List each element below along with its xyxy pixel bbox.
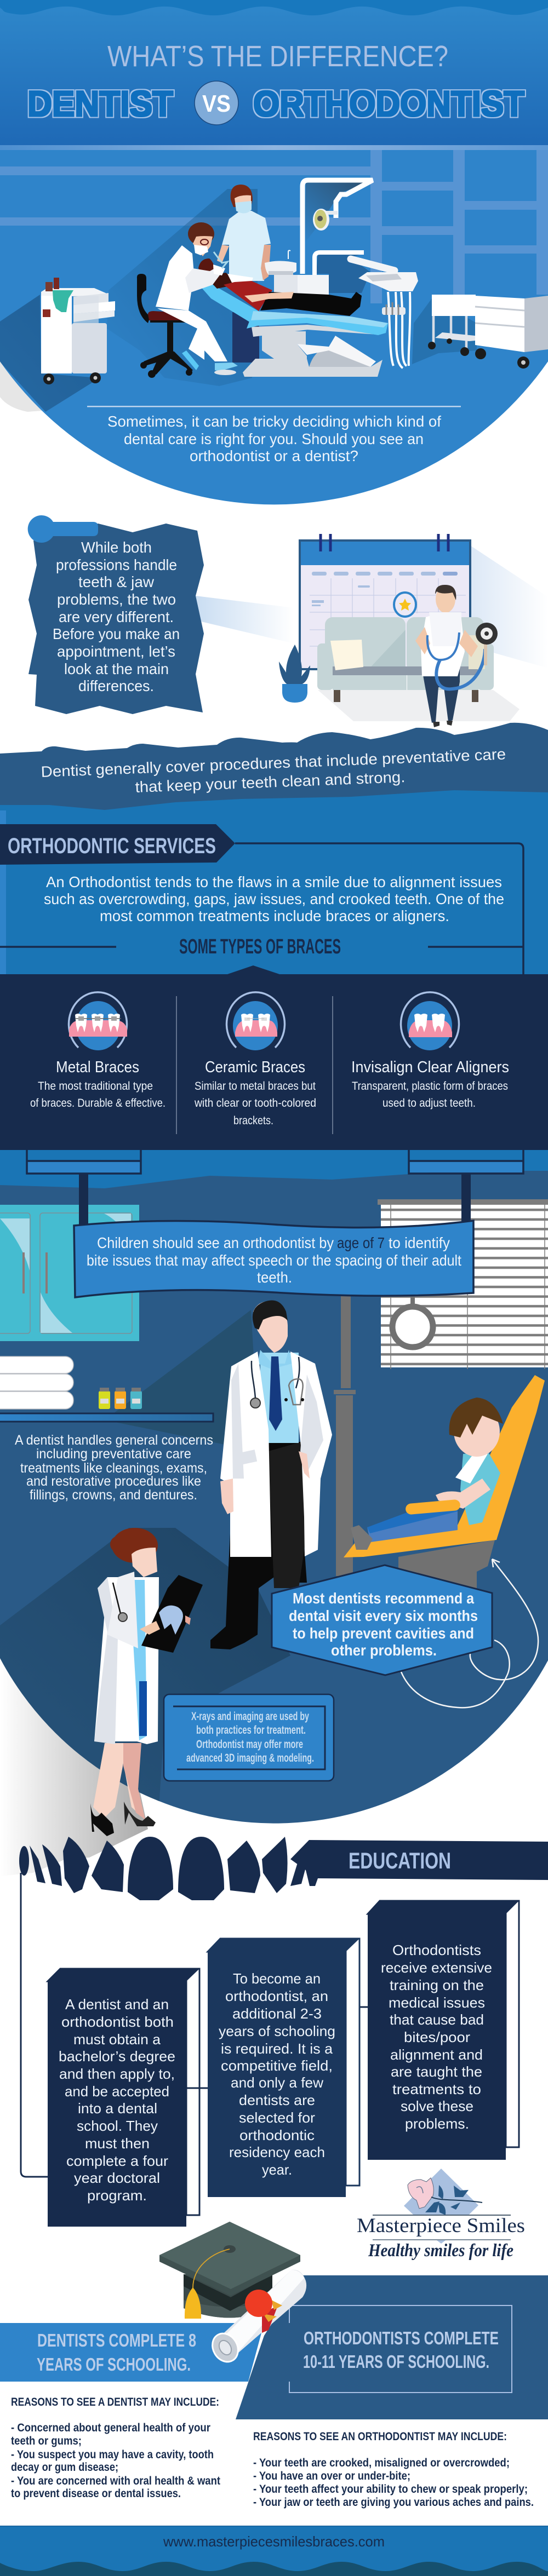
- icon: row of teeth: [19, 1837, 306, 1900]
- callout: age of 7: bite issues that may affect speech or the spacing of their adult: [87, 1252, 461, 1269]
- callout: six months visit: to help prevent cavities and: [293, 1625, 474, 1642]
- long shadows behind scene: [0, 182, 477, 412]
- callout: x-rays: [164, 1694, 334, 1781]
- panel: education step 3: alignment and: [390, 2046, 483, 2063]
- heading: orthodontic services: ORTHODONTIC SERVICES: [8, 834, 216, 858]
- text: invisalign: Transparent, plastic form of braces: [352, 1080, 508, 1092]
- panel: education step 2: [208, 1939, 359, 2197]
- frame line: education steps: [21, 1873, 48, 2177]
- text: invisalign: [351, 1059, 509, 1109]
- text: banner sentence: that keep your teeth clean and strong.: [135, 768, 406, 796]
- text: metal braces: of braces. Durable & effective.: [30, 1097, 165, 1109]
- text: both professions: problems, the two: [57, 591, 176, 608]
- panel: education step 1: program.: [87, 2187, 147, 2204]
- callout: x-rays: advanced 3D imaging & modeling.: [186, 1752, 314, 1764]
- panel: dentists complete: DENTISTS COMPLETE 8: [37, 2330, 196, 2350]
- heading: dentist: DENTIST: [27, 83, 173, 124]
- text: metal braces: Metal Braces: [56, 1059, 139, 1076]
- text: reasons to see an orthodontist: - You have an over or under-bite;: [253, 2470, 410, 2482]
- icon: pin: [28, 515, 98, 543]
- header background: [0, 0, 548, 150]
- panel: education step 3: training on the: [390, 1977, 484, 1993]
- text: ceramic braces: brackets.: [233, 1114, 273, 1127]
- text: dentist handles: [15, 1433, 213, 1503]
- curved arrow: [401, 1559, 538, 1707]
- panel: orthodontists complete: [236, 2275, 548, 2419]
- text: invisalign: Invisalign Clear Aligners: [351, 1059, 509, 1076]
- shelf: [0, 1413, 213, 1422]
- text: both professions: teeth & jaw: [78, 573, 155, 590]
- text: dentist handles: A dentist handles general concerns: [15, 1433, 213, 1448]
- text: invisalign: used to adjust teeth.: [383, 1097, 476, 1109]
- text: ceramic braces: Ceramic Braces: [205, 1059, 305, 1076]
- hanging sign brackets: [27, 1150, 523, 1174]
- text: reasons to see an orthodontist: [253, 2430, 534, 2509]
- illustration: right cabinets: [428, 295, 548, 369]
- grey shadow of dentist on white: [0, 1654, 148, 1876]
- illustration: male doctor: [210, 1300, 332, 1649]
- panel: orthodontic services background: [0, 789, 548, 1194]
- illustration: child in orange chair: [344, 1375, 545, 1591]
- icon: metal braces: [69, 992, 127, 1050]
- panel: education step 3: bites/poor: [404, 2029, 470, 2045]
- logo: masterpiece smiles: Healthy smiles for life: [368, 2241, 513, 2261]
- text: both professions: differences.: [78, 677, 154, 694]
- heading: orthodontist: ORTHODONTIST: [253, 83, 524, 124]
- footer: [0, 2526, 548, 2576]
- panel: education step 1: must obtain a: [73, 2031, 161, 2048]
- text: orthodontist explanation: An Orthodontist tends to the flaws in a smile due to alignment issues: [46, 873, 502, 890]
- text: orthodontist explanation: most common treatments include braces or aligners.: [100, 907, 449, 924]
- illustration: plant: [279, 645, 310, 703]
- callout: six months visit: other problems.: [331, 1642, 437, 1659]
- text: orthodontist explanation: such as overcrowding, gaps, jaw issues, and crooked teeth. One of the: [44, 890, 504, 907]
- illustration: nurse: [217, 185, 271, 363]
- illustration: dentist: [156, 222, 238, 375]
- text: introduction: orthodontist or a dentist?: [190, 447, 358, 464]
- callout: x-rays: X-rays and imaging are used by: [191, 1710, 309, 1723]
- sign bracket fills: [28, 1162, 522, 1172]
- panel: education step 1: complete a four: [66, 2153, 168, 2169]
- text: introduction: Sometimes, it can be tricky deciding which kind of: [107, 413, 441, 430]
- text: reasons to see a dentist: [11, 2396, 220, 2500]
- title: what's the difference: WHAT’S THE DIFFERENCE?: [107, 40, 448, 73]
- panel: dental office scene background: [0, 150, 548, 504]
- text: both professions: While both: [81, 539, 152, 556]
- text: website: www.masterpiecesmilesbraces.com: [163, 2533, 385, 2550]
- panel: education step 3: are taught the: [391, 2063, 482, 2080]
- text: banner sentence: Dentist generally cover procedures that include preventative care: [41, 745, 506, 780]
- panel: education step 1: and then apply to,: [59, 2066, 175, 2082]
- callout: age of 7: teeth.: [257, 1269, 292, 1286]
- panel: education step 3: receive extensive: [381, 1959, 492, 1976]
- text: reasons to see a dentist: to prevent disease or dental issues.: [11, 2487, 181, 2500]
- text: dentist handles: fillings, crowns, and dentures.: [30, 1487, 197, 1503]
- icon: clear aligners: [401, 992, 459, 1050]
- text: reasons to see an orthodontist: REASONS TO SEE AN ORTHODONTIST MAY INCLUDE:: [253, 2430, 507, 2443]
- badge: vs: VS: [202, 90, 231, 117]
- window frame bars: [0, 150, 548, 303]
- text: both professions: appointment, let’s: [57, 643, 175, 660]
- panel: education step 3: Orthodontists: [392, 1942, 481, 1958]
- panel: education step 2: competitive field,: [221, 2057, 333, 2074]
- connector frame line: [235, 843, 523, 975]
- illustration: doctor on sofa: [415, 585, 498, 727]
- text: both professions: [53, 539, 180, 694]
- grey shadow on white left of circle: [0, 361, 42, 412]
- beam left of calendar: [196, 596, 294, 643]
- illustration: calendar: [300, 534, 470, 669]
- panel: education step 2: years of schooling: [219, 2023, 335, 2039]
- panel: education step 3: treatments to: [392, 2081, 481, 2097]
- panel: education step 2: orthodontist, an: [225, 1988, 328, 2004]
- panel: education step 1: year doctoral: [74, 2170, 160, 2186]
- text: reasons to see a dentist: - You are concerned with oral health & want: [11, 2475, 220, 2487]
- illustration: left cart: [41, 278, 115, 384]
- illustration: grey floor lamp: [334, 1295, 433, 1576]
- heading: some types of braces: SOME TYPES OF BRACES: [179, 935, 341, 958]
- text: reasons to see a dentist: - You suspect you may have a cavity, tooth: [11, 2448, 214, 2461]
- text: introduction: dental care is right for you. Should you see an: [124, 430, 424, 447]
- text: reasons to see a dentist: - Concerned about general health of your: [11, 2422, 210, 2434]
- panel: clinic room background: [0, 1171, 548, 1824]
- divider line: [87, 406, 461, 407]
- heading: orthodontic services: [0, 824, 235, 865]
- icon: ceramic braces: [227, 992, 285, 1050]
- heading: education: EDUCATION: [349, 1848, 451, 1873]
- illustration: graduation cap: [159, 2222, 300, 2319]
- sign poles: [79, 1174, 471, 1228]
- illustration: diploma: [207, 2270, 306, 2366]
- panel: education step 3: solve these: [401, 2098, 473, 2114]
- panel: education step 1: orthodontist both: [61, 2014, 174, 2030]
- illustration: dentist chair with patient: [196, 258, 388, 377]
- large shadows in clinic: [0, 1310, 290, 1807]
- text: dentist handles: and restorative procedures like: [26, 1474, 201, 1489]
- text: reasons to see an orthodontist: - Your teeth are crooked, misaligned or overcrowded;: [253, 2457, 510, 2469]
- callout: x-rays: Orthodontist may offer more: [196, 1738, 303, 1751]
- text: ceramic braces: with clear or tooth-colored: [194, 1097, 316, 1109]
- panel: differences note: [28, 515, 204, 714]
- text: reasons to see a dentist: teeth or gums;: [11, 2435, 82, 2447]
- panel: education step 2: selected for: [239, 2109, 315, 2126]
- panel: education step 2: dentists are: [239, 2092, 315, 2108]
- panel: education step 2: orthodontic: [239, 2127, 315, 2143]
- callout: age of 7: age of 7: [337, 1234, 385, 1251]
- text: reasons to see a dentist: REASONS TO SEE A DENTIST MAY INCLUDE:: [11, 2396, 219, 2408]
- text: dentist handles: including preventative care: [36, 1446, 191, 1462]
- panel: education step 1: must then: [85, 2135, 150, 2152]
- badge: vs: [195, 81, 238, 125]
- panel: education step 1: bachelor’s degree: [59, 2048, 175, 2065]
- callout: age of 7: Children should see an orthodontist by: [97, 1234, 334, 1251]
- callout: age of 7: to identify: [389, 1234, 450, 1251]
- text: ceramic braces: Similar to metal braces but: [195, 1080, 316, 1092]
- text: orthodontist explanation: [44, 873, 504, 924]
- text: banner sentence: [41, 745, 506, 796]
- panel: education step 1: A dentist and an: [65, 1996, 169, 2013]
- illustration: female dentist: [90, 1528, 203, 1836]
- text: dentist handles: treatments like cleanings, exams,: [20, 1461, 207, 1476]
- panel: dentists complete: [0, 2323, 264, 2382]
- panel: braces types: [0, 965, 548, 1150]
- text: both professions: are very different.: [59, 608, 174, 625]
- illustration: cabinet: [0, 1205, 139, 1341]
- callout: age of 7: [74, 1221, 473, 1297]
- panel: education step 3: [368, 1901, 519, 2160]
- banner: dentist generally cover: [0, 723, 548, 810]
- logo: masterpiece smiles: [357, 2169, 525, 2261]
- panel: education step 2: To become an: [233, 1970, 321, 1987]
- panel: education step 3: that cause bad: [390, 2011, 484, 2028]
- illustration: bottles: [99, 1388, 142, 1409]
- text: both professions: look at the main: [64, 660, 169, 677]
- text: reasons to see a dentist: decay or gum disease;: [11, 2461, 118, 2474]
- panel: education step 2: additional 2-3: [232, 2005, 322, 2022]
- illustration: window blinds: [378, 1199, 548, 1369]
- panel: education step 1: and be accepted: [65, 2083, 169, 2100]
- callout: six months visit: Most dentists recommend a: [293, 1590, 474, 1607]
- beam right of calendar: [470, 545, 548, 668]
- panel: education step 1: school. They: [77, 2118, 158, 2134]
- panel: education step 1: into a dental: [78, 2100, 157, 2117]
- text: both professions: Before you make an: [53, 625, 180, 642]
- callout: six months visit: [272, 1565, 492, 1675]
- callout: six months visit: dental visit every six months: [289, 1607, 478, 1624]
- logo: masterpiece smiles: Masterpiece Smiles: [357, 2215, 525, 2237]
- panel: education step 1: [48, 1969, 199, 2227]
- text: introduction: [107, 413, 441, 464]
- panel: education step 3: problems.: [405, 2115, 469, 2132]
- text: both professions: professions handle: [56, 556, 177, 573]
- panel: education step 2: year.: [262, 2161, 292, 2178]
- illustration: dental unit and lamp: [265, 180, 418, 368]
- panel: dentists complete: YEARS OF SCHOOLING.: [37, 2354, 191, 2374]
- panel: education step 3: medical issues: [389, 1994, 485, 2011]
- text: metal braces: The most traditional type: [38, 1080, 153, 1092]
- callout: x-rays: both practices for treatment.: [196, 1724, 306, 1737]
- illustration: towels: [0, 1356, 73, 1409]
- illustration: sofa: [317, 617, 520, 721]
- panel: education step 2: is required. It is a: [221, 2040, 333, 2057]
- panel: education step 2: residency each: [229, 2144, 325, 2160]
- connector: [186, 2007, 368, 2088]
- panel: education step 2: and only a few: [231, 2074, 323, 2091]
- text: metal braces: [30, 1059, 165, 1109]
- illustration: stool: [137, 274, 193, 378]
- text: ceramic braces: [194, 1059, 316, 1127]
- heading: education: [290, 1840, 548, 1886]
